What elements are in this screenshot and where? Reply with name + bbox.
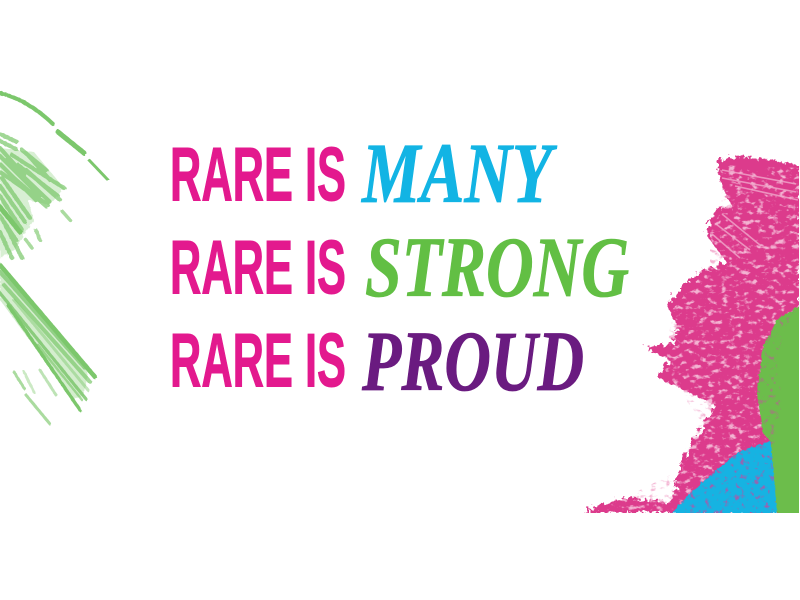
line 3: rare is proud [170, 313, 584, 409]
line 1: rare is many: RARE IS [170, 132, 346, 218]
pink paint splash, right [570, 150, 800, 525]
line 2: rare is strong: STRONG [365, 219, 629, 315]
headline text [170, 125, 629, 409]
line 1: rare is many: MANY [360, 125, 558, 221]
paint texture highlights [600, 165, 800, 513]
green brush strokes, left [0, 93, 108, 424]
blue paint layer [672, 441, 782, 513]
white bleed over bottom and right edge [570, 513, 800, 525]
line 2: rare is strong [170, 219, 629, 315]
line 2: rare is strong: RARE IS [170, 226, 346, 310]
line 3: rare is proud: RARE IS [170, 318, 346, 404]
line 3: rare is proud: PROUD [361, 313, 584, 409]
green paint layer [757, 305, 800, 513]
